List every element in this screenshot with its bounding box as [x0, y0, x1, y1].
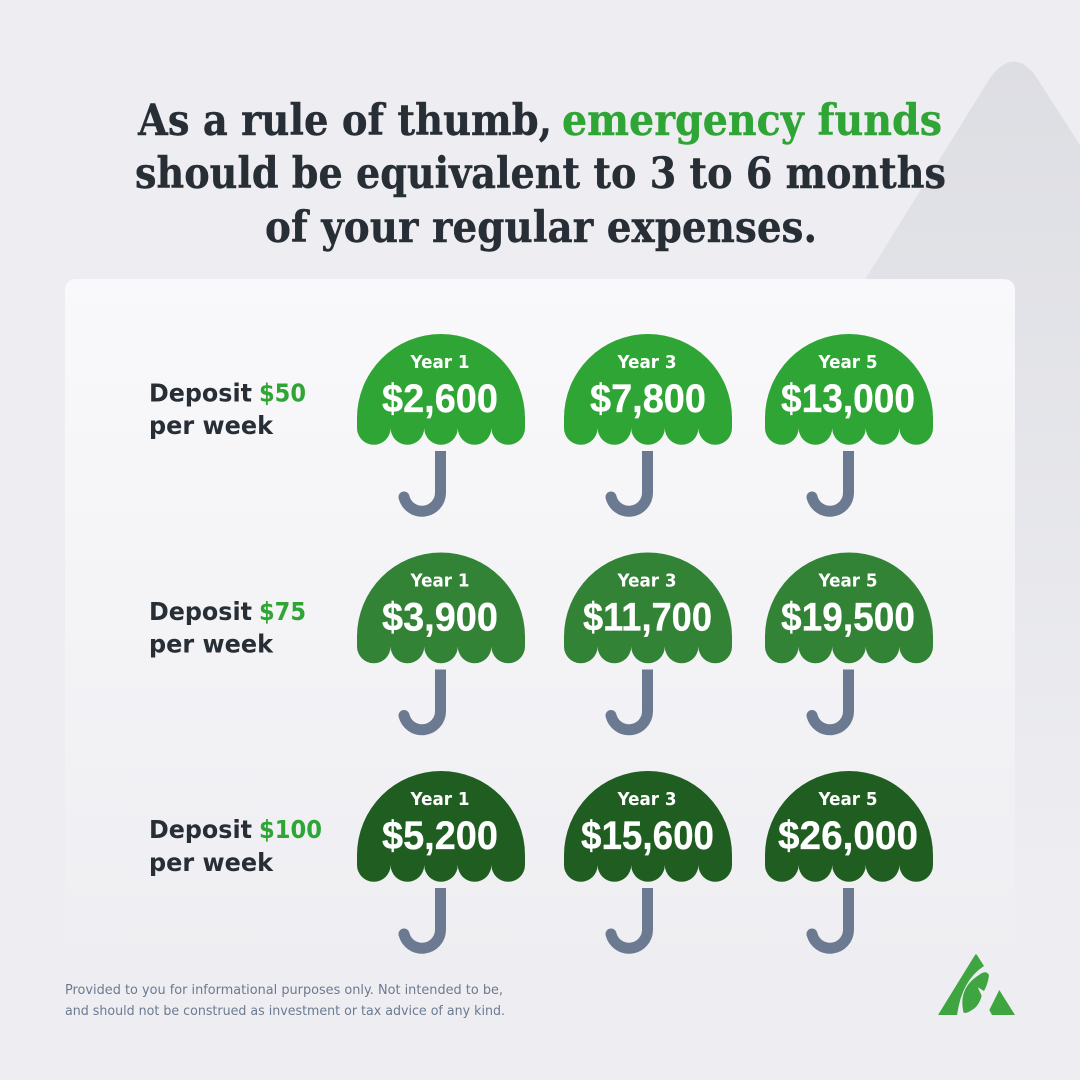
umbrella: $50 year 5: $13,000 [781, 377, 915, 421]
umbrella: $50 year 5: Year 5 [818, 352, 878, 373]
row label: deposit $75: Deposit [149, 597, 252, 626]
umbrella: $75 year 3: $11,700 [583, 596, 712, 640]
umbrella: $50 year 3: $7,800 [590, 377, 706, 421]
row label: deposit $50: Deposit [149, 378, 252, 408]
row label: deposit $100: Deposit [149, 815, 252, 844]
umbrella: $75 year 5: Year 5 [818, 570, 878, 592]
title: should be equivalent to 3 to 6 months [135, 149, 946, 199]
row label: deposit $100 [149, 815, 322, 877]
umbrella: $50 year 1: Year 1 [410, 352, 470, 373]
umbrella: $100 year 5: $26,000 [778, 814, 918, 858]
umbrella: $100 year 3: $15,600 [581, 814, 714, 858]
icon: logo [938, 954, 1015, 1015]
row label: deposit $50: $50 [259, 378, 306, 408]
umbrella: $50 year 3 [564, 334, 732, 511]
row label: deposit $75: per week [149, 630, 274, 658]
umbrella: $100 year 1: $5,200 [382, 814, 498, 858]
umbrella: $75 year 1 [357, 552, 525, 730]
row label: deposit $100: per week [149, 848, 274, 877]
umbrella: $50 year 1 [357, 334, 525, 511]
title: of your regular expenses. [265, 203, 817, 253]
row label: deposit $75: $75 [259, 597, 306, 626]
umbrella: $75 year 3: Year 3 [617, 570, 676, 592]
umbrella: $50 year 1: $2,600 [382, 377, 498, 421]
row label: deposit $100: $100 [259, 815, 322, 844]
umbrella: $75 year 3 [564, 552, 732, 730]
title: As a rule of thumb, [137, 96, 552, 146]
umbrella: $75 year 1: $3,900 [382, 596, 498, 640]
background mountain shape [840, 62, 1080, 880]
umbrella: $100 year 3: Year 3 [617, 789, 676, 810]
disclaimer text: Provided to you for informational purposes only. Not intended to be, [65, 982, 503, 998]
title: emergency funds [562, 96, 942, 146]
umbrella: $75 year 1: Year 1 [410, 570, 470, 592]
umbrella: $75 year 5: $19,500 [781, 596, 915, 640]
umbrella: $100 year 3 [564, 771, 732, 948]
row label: deposit $50: per week [149, 411, 274, 440]
disclaimer text [65, 982, 505, 1019]
disclaimer text: and should not be construed as investment or tax advice of any kind. [65, 1003, 505, 1019]
umbrella: $100 year 1: Year 1 [410, 789, 470, 810]
panel: savings card [65, 279, 1015, 980]
umbrella: $75 year 5 [765, 552, 933, 730]
row label: deposit $75 [149, 597, 306, 658]
umbrella: $50 year 3: Year 3 [617, 352, 676, 373]
umbrella: $100 year 5 [765, 771, 933, 948]
title [135, 96, 946, 253]
umbrella: $50 year 5 [765, 334, 933, 511]
umbrella: $100 year 1 [357, 771, 525, 948]
umbrella: $100 year 5: Year 5 [818, 789, 878, 810]
row label: deposit $50 [149, 378, 306, 440]
